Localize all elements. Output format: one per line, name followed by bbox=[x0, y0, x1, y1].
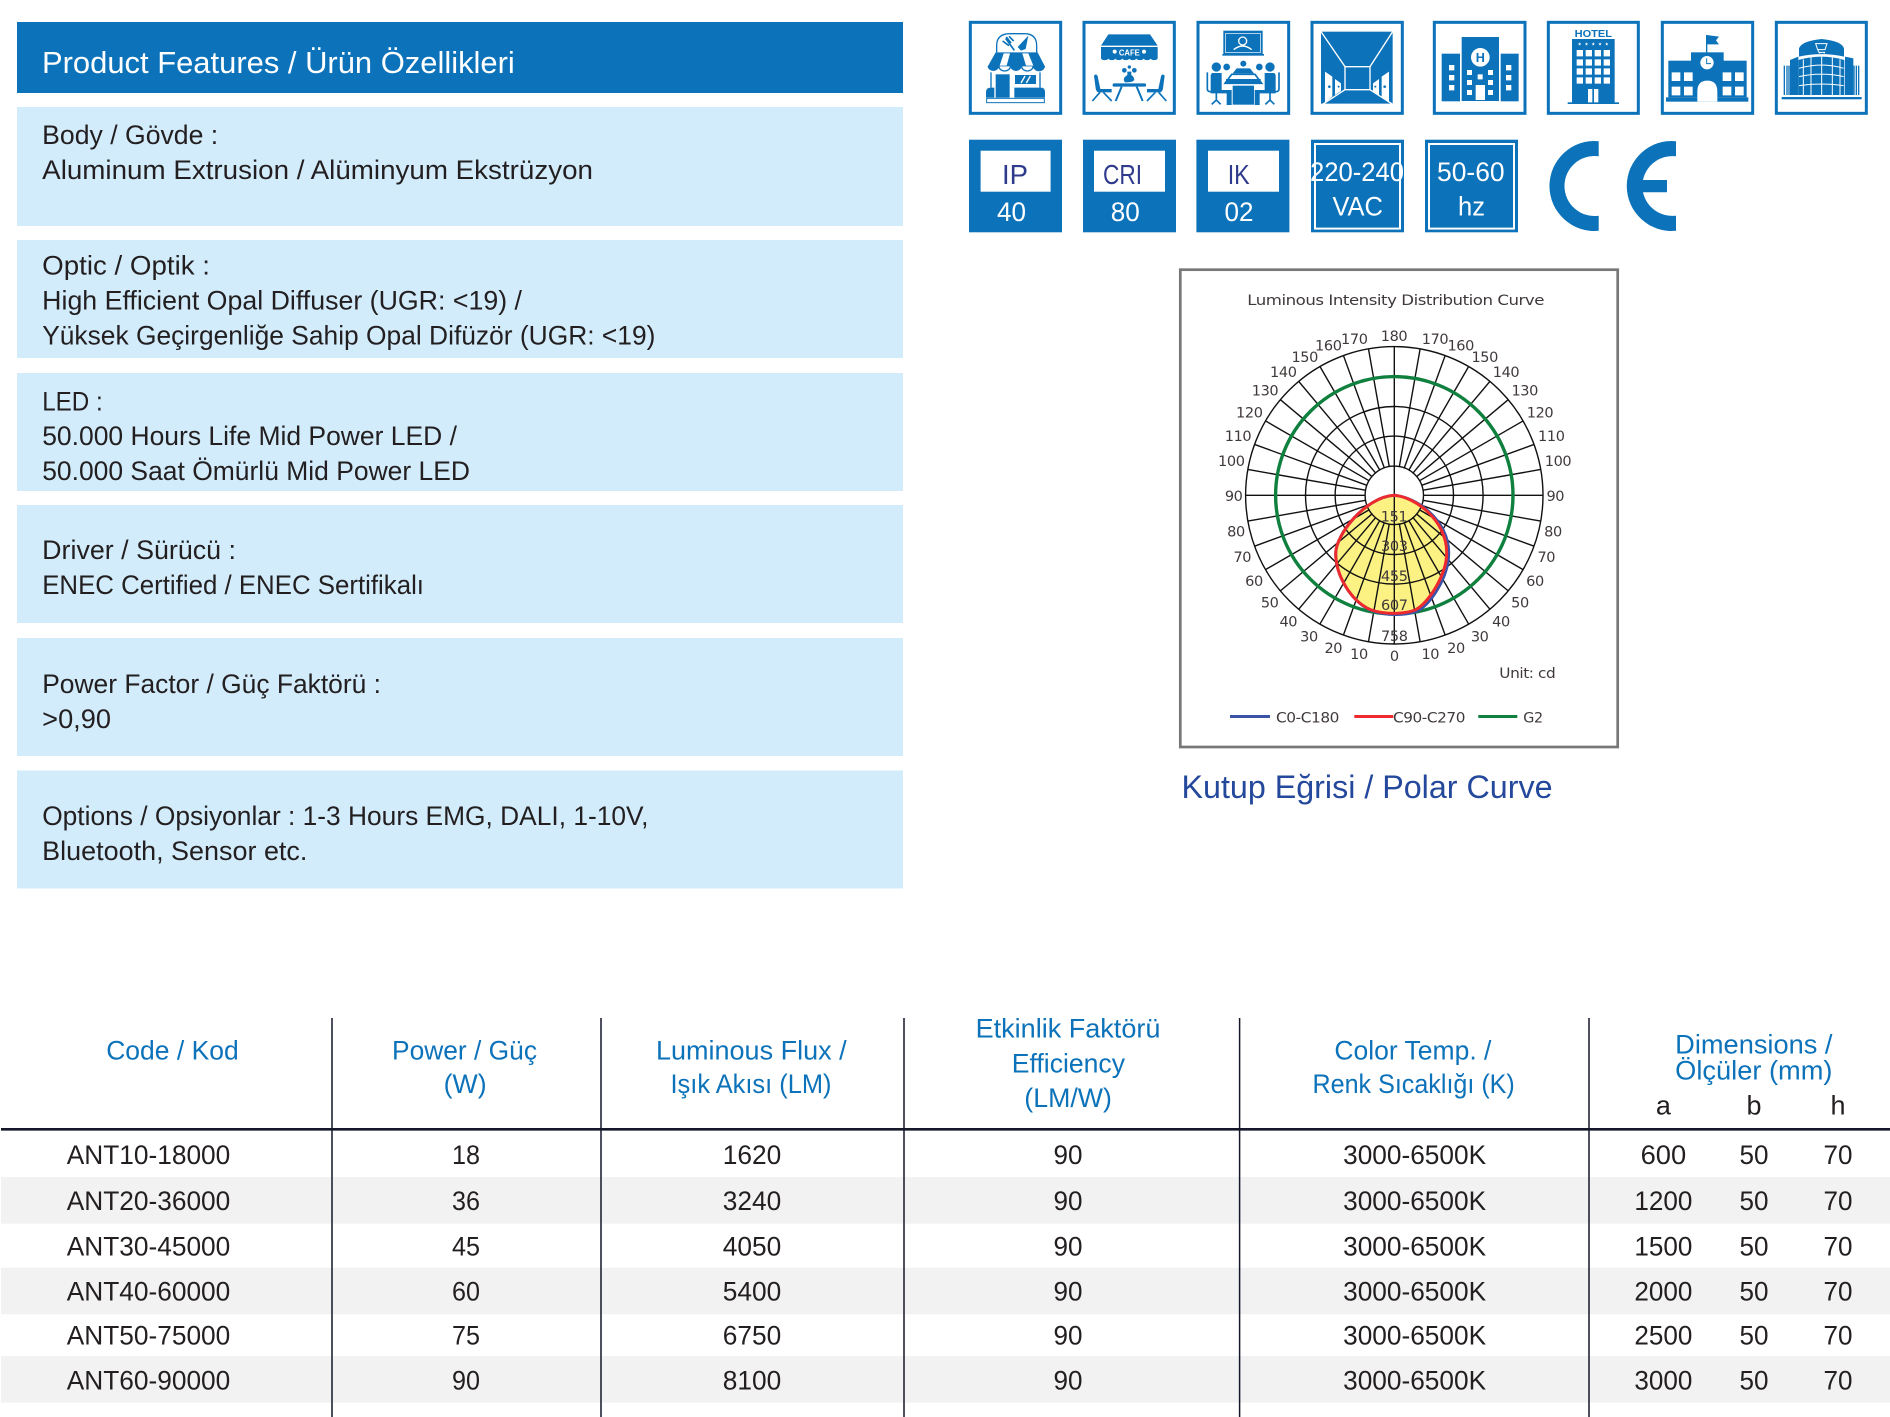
table header: (W) bbox=[444, 1069, 487, 1099]
row: ANT60-90000: ANT60-90000 bbox=[67, 1366, 230, 1396]
row: ANT10-18000: ANT10-18000 bbox=[67, 1140, 230, 1170]
feature: LED: 50.000 Hours Life Mid Power LED / bbox=[42, 421, 458, 451]
row: ANT10-18000: 1620 bbox=[723, 1140, 781, 1170]
chart legend: C90-C270 bbox=[1393, 710, 1465, 726]
row: ANT10-18000 bbox=[67, 1140, 1853, 1170]
row: ANT30-45000: ANT30-45000 bbox=[67, 1232, 230, 1262]
row: ANT10-18000: 3000-6500K bbox=[1343, 1140, 1486, 1170]
angle labels: 100 bbox=[1218, 454, 1245, 470]
angle labels: 70 bbox=[1233, 550, 1251, 566]
intensity scale labels: 455 bbox=[1381, 569, 1408, 585]
table header: Color Temp. / bbox=[1334, 1035, 1492, 1065]
feature: optic bbox=[17, 240, 903, 358]
badge: 220-240 VAC: 220-240 bbox=[1310, 157, 1404, 187]
panel: product features bbox=[17, 22, 903, 888]
table header: Code / Kod bbox=[106, 1035, 239, 1065]
feature: LED: LED : bbox=[42, 386, 103, 416]
angle labels: 40 bbox=[1492, 614, 1510, 630]
angle labels: 90 bbox=[1225, 489, 1243, 505]
row: ANT30-45000: 4050 bbox=[723, 1232, 781, 1262]
badge: 220-240 VAC bbox=[1310, 140, 1404, 232]
row: ANT20-36000: 36 bbox=[452, 1186, 480, 1216]
row: ANT10-18000: 50 bbox=[1740, 1140, 1768, 1170]
row: ANT40-60000: 2000 bbox=[1634, 1276, 1692, 1306]
intensity scale labels: 303 bbox=[1381, 539, 1408, 555]
angle labels: 170 bbox=[1341, 332, 1368, 348]
light distribution lobe bbox=[1336, 495, 1449, 615]
feature: LED: 50.000 Saat Ömürlü Mid Power LED bbox=[42, 456, 470, 486]
heading: product features bbox=[17, 22, 903, 93]
angle labels: 70 bbox=[1537, 550, 1555, 566]
angle labels: 10 bbox=[1350, 647, 1368, 663]
chart legend: C0-C180 bbox=[1276, 710, 1339, 726]
intensity scale labels: 151 bbox=[1381, 510, 1407, 526]
row: ANT60-90000: 8100 bbox=[723, 1366, 781, 1396]
row: ANT20-36000: 70 bbox=[1824, 1186, 1852, 1216]
angle labels: 90 bbox=[1546, 489, 1564, 505]
table header: h bbox=[1830, 1090, 1846, 1120]
row: ANT10-18000: 18 bbox=[452, 1140, 480, 1170]
table header: Işık Akısı (LM) bbox=[670, 1069, 832, 1099]
table header: (LM/W) bbox=[1024, 1083, 1112, 1113]
row: ANT60-90000: 3000 bbox=[1634, 1366, 1692, 1396]
angle labels: 160 bbox=[1447, 338, 1474, 354]
icon: school bbox=[1662, 22, 1753, 113]
angle labels: 100 bbox=[1545, 454, 1571, 470]
icon: restaurant shop bbox=[970, 22, 1061, 113]
row: ANT40-60000: 3000-6500K bbox=[1343, 1276, 1486, 1306]
row: ANT30-45000: 50 bbox=[1740, 1232, 1768, 1262]
row: ANT20-36000: 1200 bbox=[1634, 1186, 1692, 1216]
icon: hotel: HOTEL bbox=[1575, 29, 1612, 40]
badge: IP 40: IP bbox=[1002, 159, 1028, 190]
chart title: Luminous Intensity Distribution Curve bbox=[1247, 293, 1544, 309]
polar curve caption: Kutup Eğrisi / Polar Curve bbox=[1182, 769, 1552, 805]
badge: 50-60 hz: hz bbox=[1458, 191, 1485, 221]
row: ANT50-75000: 6750 bbox=[723, 1320, 781, 1350]
icon: corridor bbox=[1312, 22, 1402, 113]
icon: hotel bbox=[1548, 22, 1638, 113]
heading: product features: Product Features / Ürün Özellikleri bbox=[42, 45, 515, 80]
feature: power factor: >0,90 bbox=[42, 704, 111, 734]
row: ANT30-45000: 3000-6500K bbox=[1343, 1232, 1486, 1262]
angle labels: 50 bbox=[1261, 596, 1279, 612]
intensity scale labels bbox=[1381, 510, 1408, 645]
row: ANT20-36000: 50 bbox=[1740, 1186, 1768, 1216]
table header: Dimensions / bbox=[1675, 1030, 1833, 1060]
feature: body: Body / Gövde : bbox=[42, 120, 218, 150]
row: ANT50-75000: 90 bbox=[1054, 1320, 1082, 1350]
row: ANT50-75000: ANT50-75000 bbox=[67, 1320, 230, 1350]
row: ANT40-60000 bbox=[67, 1276, 1853, 1306]
angle labels: 20 bbox=[1324, 641, 1342, 657]
chart legend: G2 bbox=[1523, 710, 1543, 726]
angle labels: 120 bbox=[1236, 406, 1263, 422]
feature: optic: Optic / Optik : bbox=[42, 250, 210, 280]
feature: optic: High Efficient Opal Diffuser (UGR: <19) / bbox=[42, 286, 523, 316]
angle labels: 110 bbox=[1538, 429, 1565, 445]
product table bbox=[1, 1014, 1890, 1417]
row: ANT30-45000: 70 bbox=[1824, 1232, 1852, 1262]
angle labels: 50 bbox=[1511, 596, 1529, 612]
G2 curve bbox=[1276, 377, 1513, 614]
C90-C270 curve bbox=[1336, 495, 1447, 613]
row: ANT50-75000: 2500 bbox=[1634, 1320, 1692, 1350]
feature: driver: ENEC Certified / ENEC Sertifikalı bbox=[42, 570, 424, 600]
angle labels: 10 bbox=[1421, 647, 1439, 663]
row stripes bbox=[1, 1177, 1890, 1403]
table header bbox=[106, 1014, 1846, 1120]
feature: driver: Driver / Sürücü : bbox=[42, 535, 236, 565]
polar curve chart bbox=[1180, 270, 1618, 747]
badge: IP 40 bbox=[969, 140, 1062, 232]
row: ANT50-75000: 75 bbox=[452, 1320, 480, 1350]
feature: options: Bluetooth, Sensor etc. bbox=[42, 836, 307, 866]
row: ANT60-90000 bbox=[67, 1366, 1853, 1396]
application icons row bbox=[970, 22, 1866, 113]
badge: CRI 80 bbox=[1083, 140, 1176, 232]
icon: shopping mall bbox=[1776, 22, 1866, 113]
angle labels: 120 bbox=[1527, 406, 1553, 422]
angle labels: 140 bbox=[1270, 365, 1297, 381]
row: ANT60-90000: 90 bbox=[452, 1366, 480, 1396]
row: ANT20-36000: 3240 bbox=[723, 1186, 781, 1216]
row: ANT60-90000: 3000-6500K bbox=[1343, 1366, 1486, 1396]
row: ANT30-45000: 1500 bbox=[1634, 1232, 1692, 1262]
table header: Power / Güç bbox=[392, 1035, 537, 1065]
row: ANT40-60000: 70 bbox=[1824, 1276, 1852, 1306]
badge: IK 02: 02 bbox=[1224, 197, 1254, 227]
angle labels bbox=[1218, 329, 1571, 665]
badge: 50-60 hz: 50-60 bbox=[1437, 157, 1505, 187]
angle labels: 140 bbox=[1493, 365, 1519, 381]
row: ANT60-90000: 90 bbox=[1054, 1366, 1082, 1396]
angle labels: 80 bbox=[1227, 524, 1245, 540]
icon: hospital: H bbox=[1476, 51, 1485, 65]
angle labels: 0 bbox=[1390, 649, 1399, 665]
row: ANT30-45000 bbox=[67, 1232, 1853, 1262]
row: ANT20-36000: 3000-6500K bbox=[1343, 1186, 1486, 1216]
table header: Renk Sıcaklığı (K) bbox=[1312, 1069, 1515, 1099]
unit label: Unit: cd bbox=[1499, 666, 1555, 682]
feature: power factor: Power Factor / Güç Faktörü : bbox=[42, 669, 381, 699]
table header: a bbox=[1656, 1090, 1672, 1120]
badge: CRI 80: 80 bbox=[1111, 197, 1140, 227]
row: ANT10-18000: 90 bbox=[1054, 1140, 1082, 1170]
icon: hotel: ★★★★★ bbox=[1578, 42, 1610, 47]
angle labels: 60 bbox=[1526, 574, 1544, 590]
row: ANT20-36000: ANT20-36000 bbox=[67, 1186, 230, 1216]
table header: Etkinlik Faktörü bbox=[976, 1014, 1160, 1044]
feature: driver bbox=[17, 505, 903, 623]
angle labels: 60 bbox=[1245, 574, 1263, 590]
feature: power factor bbox=[17, 638, 903, 756]
row: ANT50-75000 bbox=[67, 1320, 1853, 1350]
angle labels: 160 bbox=[1315, 338, 1342, 354]
icon: meeting room bbox=[1198, 22, 1289, 113]
C0-C180 curve bbox=[1336, 495, 1449, 615]
icon: CE mark bbox=[1549, 141, 1676, 231]
icon: hospital bbox=[1434, 22, 1525, 113]
icon: cafe: CAFE bbox=[1119, 49, 1140, 58]
badge: 220-240 VAC: VAC bbox=[1332, 191, 1383, 221]
angle labels: 170 bbox=[1422, 332, 1448, 348]
table rules bbox=[1, 1018, 1890, 1417]
polar grid bbox=[1246, 347, 1543, 644]
row: ANT10-18000: 600 bbox=[1641, 1140, 1686, 1170]
row: ANT40-60000: 90 bbox=[1054, 1276, 1082, 1306]
row: ANT40-60000: ANT40-60000 bbox=[67, 1276, 230, 1306]
table header: Efficiency bbox=[1012, 1049, 1125, 1079]
table header: b bbox=[1746, 1090, 1762, 1120]
row: ANT10-18000: 70 bbox=[1824, 1140, 1852, 1170]
angle labels: 40 bbox=[1279, 614, 1297, 630]
chart legend bbox=[1230, 710, 1543, 726]
angle labels: 30 bbox=[1300, 630, 1318, 646]
row: ANT50-75000: 3000-6500K bbox=[1343, 1320, 1486, 1350]
row: ANT50-75000: 50 bbox=[1740, 1320, 1768, 1350]
table header: Luminous Flux / bbox=[656, 1035, 847, 1065]
badge: 50-60 hz bbox=[1425, 140, 1518, 232]
angle labels: 180 bbox=[1381, 329, 1407, 345]
angle labels: 150 bbox=[1291, 350, 1318, 366]
table header: Ölçüler (mm) bbox=[1675, 1055, 1832, 1085]
row: ANT40-60000: 5400 bbox=[723, 1276, 781, 1306]
row: ANT30-45000: 45 bbox=[452, 1232, 480, 1262]
row: ANT40-60000: 60 bbox=[452, 1276, 480, 1306]
badge: IK 02: IK bbox=[1228, 159, 1250, 190]
angle labels: 110 bbox=[1225, 429, 1251, 445]
feature: options: Options / Opsiyonlar : 1-3 Hours EMG, DALI, 1-10V, bbox=[42, 801, 648, 831]
badge: CRI 80: CRI bbox=[1103, 159, 1142, 190]
angle labels: 130 bbox=[1511, 384, 1538, 400]
angle labels: 130 bbox=[1252, 384, 1278, 400]
angle labels: 30 bbox=[1471, 630, 1489, 646]
feature: body: Aluminum Extrusion / Alüminyum Ekstrüzyon bbox=[42, 155, 593, 185]
intensity scale labels: 607 bbox=[1381, 598, 1408, 614]
row: ANT40-60000: 50 bbox=[1740, 1276, 1768, 1306]
badge: IK 02 bbox=[1196, 140, 1289, 232]
feature: body bbox=[17, 107, 903, 226]
row: ANT20-36000: 90 bbox=[1054, 1186, 1082, 1216]
row: ANT30-45000: 90 bbox=[1054, 1232, 1082, 1262]
row: ANT60-90000: 50 bbox=[1740, 1366, 1768, 1396]
feature: LED bbox=[17, 373, 903, 491]
row: ANT50-75000: 70 bbox=[1824, 1320, 1852, 1350]
intensity scale labels: 758 bbox=[1381, 629, 1408, 645]
badge: IP 40: 40 bbox=[997, 197, 1026, 227]
row: ANT20-36000 bbox=[67, 1186, 1853, 1216]
angle labels: 150 bbox=[1471, 350, 1498, 366]
angle labels: 20 bbox=[1447, 641, 1465, 657]
angle labels: 80 bbox=[1544, 524, 1562, 540]
icon: cafe bbox=[1084, 22, 1174, 113]
row: ANT60-90000: 70 bbox=[1824, 1366, 1852, 1396]
specification badges row bbox=[969, 140, 1518, 232]
feature: options bbox=[17, 770, 903, 888]
feature: optic: Yüksek Geçirgenliğe Sahip Opal Difüzör (UGR: <19) bbox=[42, 320, 655, 350]
